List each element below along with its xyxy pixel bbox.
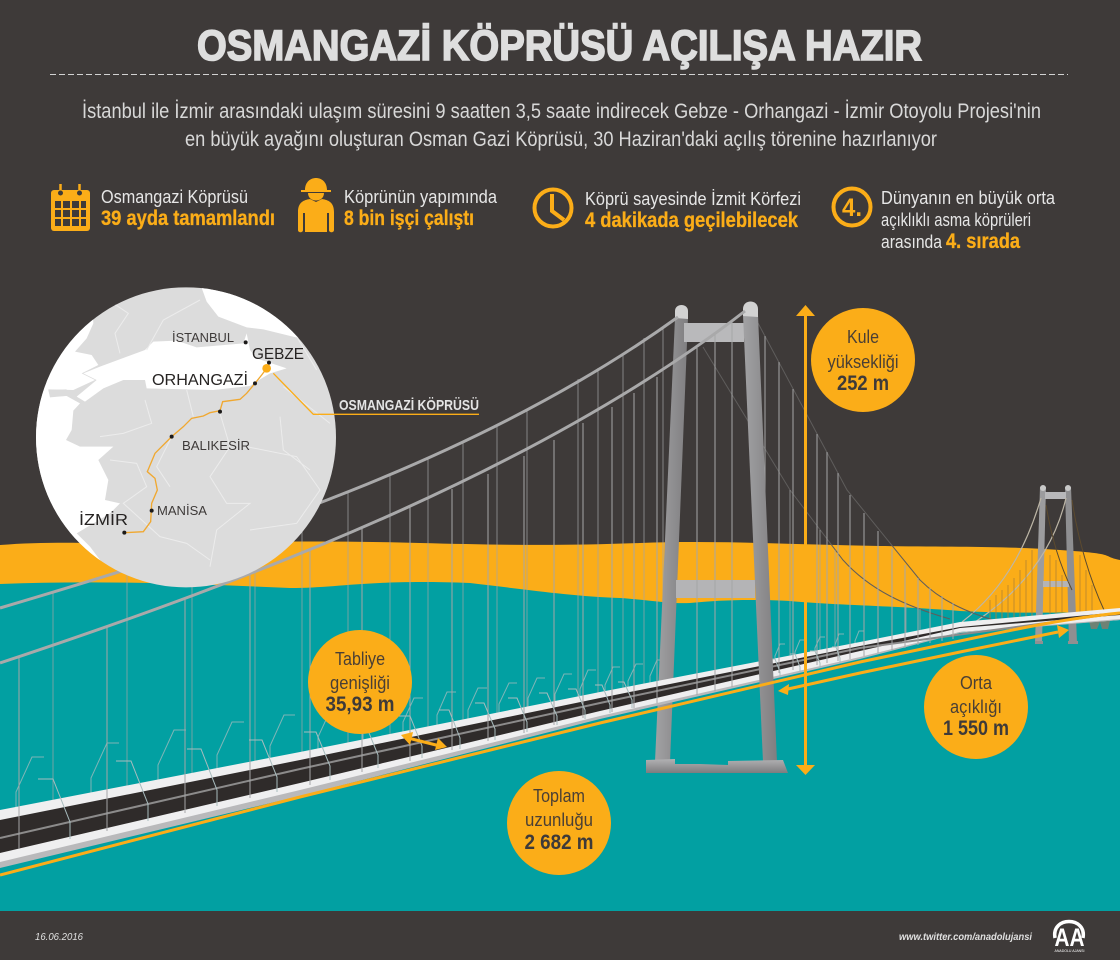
stat: 4th place: Dünyanın en büyük orta	[881, 188, 1056, 208]
tower base	[646, 759, 788, 773]
callout: centre span: 1 550 m	[943, 717, 1009, 740]
stat: 8 thousand workers: Köprünün yapımında	[344, 187, 498, 207]
label: Manisa: MANİSA	[157, 503, 207, 518]
callout: deck width	[308, 630, 412, 734]
title: OSMANGAZİ KÖPRÜSÜ AÇILIŞA HAZIR	[197, 22, 922, 70]
callout: tower height: 252 m	[837, 372, 889, 395]
arrow: tower height	[796, 305, 815, 775]
callout: tower height	[811, 308, 915, 412]
route	[124, 368, 267, 533]
callout: centre span: Orta	[960, 673, 993, 693]
main span thin cables	[703, 323, 1000, 622]
bridge location	[262, 364, 271, 373]
lamp posts far side	[16, 631, 864, 809]
tower caps	[675, 302, 758, 319]
icon: rank four: 4.	[842, 194, 862, 222]
callout: deck width: Tabliye	[335, 649, 385, 669]
label: Osmangazi Köprüsü: OSMANGAZİ KÖPRÜSÜ	[339, 397, 479, 414]
stat: 4 minutes: 4 dakikada geçilebilecek	[585, 209, 798, 232]
deck length line	[0, 613, 1120, 875]
map disc	[27, 283, 479, 597]
orange land band	[0, 542, 1120, 640]
icon: rank four	[834, 188, 870, 226]
callout: centre span: açıklığı	[950, 697, 1002, 717]
label: Orhangazi: ORHANGAZİ	[152, 370, 248, 389]
stat: 8 thousand workers	[298, 178, 498, 232]
title divider	[50, 74, 1068, 76]
callout: total length: Toplam	[533, 786, 585, 806]
main cables	[0, 311, 745, 663]
leader line	[273, 373, 479, 414]
callout: total length	[507, 771, 611, 875]
stat: 4th place: 4. sırada	[946, 230, 1020, 253]
icon: clock	[534, 190, 572, 226]
hangers behind deck	[53, 326, 920, 802]
callout: total length: 2 682 m	[524, 831, 594, 854]
near tower right leg	[743, 315, 777, 762]
callout: tower height: Kule	[847, 327, 879, 347]
callout: tower height: yüksekliği	[828, 352, 898, 372]
callout: centre span	[924, 655, 1028, 759]
label: İzmir: İZMİR	[79, 510, 128, 529]
label: Gebze: GEBZE	[252, 346, 304, 363]
icon: worker	[298, 178, 334, 232]
date: 16.06.2016	[35, 932, 83, 943]
label: Balıkesir: BALIKESİR	[182, 438, 250, 453]
callout: total length: uzunluğu	[525, 810, 593, 830]
tower crossbeams	[676, 323, 755, 598]
bridge	[0, 302, 1120, 868]
footer	[0, 911, 1120, 960]
city dots	[122, 340, 271, 535]
twitter address: www.twitter.com/anadolujansi	[899, 931, 1033, 943]
hangers in front of deck	[19, 320, 953, 849]
stat: 4th place: arasında	[881, 232, 943, 252]
stat: 4th place	[834, 188, 1056, 253]
stat: 39 months: 39 ayda tamamlandı	[101, 207, 275, 230]
callout: deck width: genişliği	[330, 673, 390, 693]
stat: 4 minutes: Köprü sayesinde İzmit Körfezi	[585, 189, 801, 209]
stat: 8 thousand workers: 8 bin işçi çalıştı	[344, 207, 474, 230]
callout: deck width: 35,93 m	[326, 693, 394, 716]
teal sea	[0, 582, 1120, 911]
far tower cables	[962, 498, 1104, 630]
intro text	[82, 100, 1041, 151]
stat: 4 minutes	[534, 189, 801, 232]
deck	[0, 608, 1120, 868]
logo: Anadolu Agency: AA	[1054, 924, 1084, 952]
icon: calendar	[51, 184, 90, 231]
intro text: en büyük ayağını oluşturan Osman Gazi Köprüsü, 30 Haziran'daki açılış törenine hazırlanıyor	[185, 128, 937, 151]
lamp posts near side	[38, 647, 840, 839]
arrow: deck width	[401, 732, 447, 750]
stat: 4th place: açıklıklı asma köprüleri	[881, 210, 1031, 230]
logo: Anadolu Agency: ANADOLU AJANSI	[1054, 948, 1084, 953]
arrow: centre span	[778, 625, 1069, 695]
label: İstanbul: İSTANBUL	[172, 330, 234, 345]
near tower left leg	[655, 318, 688, 762]
stat: 39 months	[51, 184, 275, 231]
map	[27, 283, 479, 597]
stat: 39 months: Osmangazi Köprüsü	[101, 187, 248, 207]
far tower	[1035, 485, 1114, 644]
